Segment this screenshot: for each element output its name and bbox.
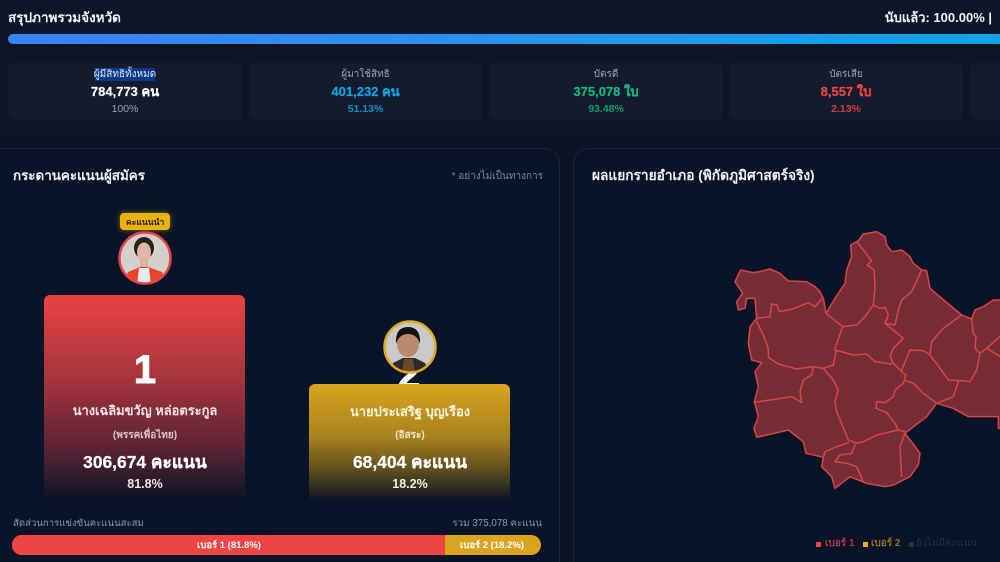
avatar: candidate 2	[383, 320, 437, 374]
stat card: spoiled ballots: บัตรเสีย	[829, 69, 863, 80]
stat card: voters turned out: 51.13%	[348, 103, 383, 115]
top summary section	[0, 0, 1000, 135]
counted percentage: นับแล้ว: 100.00% |	[885, 10, 992, 25]
selected label highlight	[95, 68, 155, 81]
leader badge: คะแนนนำ	[126, 217, 164, 227]
map legend: เบอร์ 2	[871, 538, 900, 549]
leader badge	[120, 213, 170, 230]
legend: number 1	[816, 542, 821, 547]
stat card: eligible voters: 100%	[112, 103, 138, 115]
panel: district map	[573, 148, 1000, 562]
stat card: valid ballots: บัตรดี	[594, 69, 618, 80]
segment: number 2: เบอร์ 2 (18.2%)	[460, 540, 524, 551]
stat card: valid ballots: 93.48%	[588, 103, 624, 115]
legend: number 2	[863, 542, 868, 547]
map outline	[735, 232, 1000, 488]
candidate 2 party: (อิสระ)	[395, 430, 425, 441]
share bar total: รวม 375,078 คะแนน	[452, 518, 542, 529]
candidate 2 name: นายประเสริฐ บุญเรือง	[350, 404, 470, 419]
stat card: cut off at right edge	[970, 63, 1000, 120]
progress bar	[8, 34, 1000, 44]
panel heading: กระดานคะแนนผู้สมัคร	[13, 168, 145, 183]
stat card: spoiled ballots: 8,557 ใบ	[821, 84, 871, 99]
rank number 2, mostly hidden: 2	[398, 353, 420, 397]
candidate 1 party: (พรรคเพื่อไทย)	[113, 430, 177, 441]
candidate 1 name: นางเฉลิมขวัญ หล่อตระกูล	[73, 403, 217, 418]
map legend	[816, 537, 977, 549]
candidate 2 percent: 18.2%	[392, 477, 428, 491]
candidate 1 bar	[44, 295, 245, 500]
panel: candidate scoreboard	[0, 148, 560, 562]
avatar: candidate 1	[118, 231, 172, 285]
share bar	[12, 535, 541, 555]
stat card: eligible voters	[8, 63, 242, 120]
stat card: voters turned out	[249, 63, 482, 120]
candidate 1 percent: 81.8%	[127, 477, 163, 491]
segment: number 1: เบอร์ 1 (81.8%)	[197, 540, 261, 551]
stat card: eligible voters: ผู้มีสิทธิทั้งหมด	[94, 69, 156, 80]
segment: number 1	[12, 535, 445, 555]
share bar caption: สัดส่วนการแข่งขันคะแนนสะสม	[13, 518, 144, 529]
district borders	[754, 242, 1000, 482]
candidate 2 votes: 68,404 คะแนน	[353, 452, 467, 472]
heading: province overview: สรุปภาพรวมจังหวัด	[8, 10, 121, 25]
candidate 2 bar	[309, 384, 510, 500]
stat card: valid ballots	[489, 63, 723, 120]
rank number 1: 1	[134, 348, 156, 392]
stat card: spoiled ballots	[729, 63, 963, 120]
legend: no votes	[909, 542, 914, 547]
stat card: voters turned out: ผู้มาใช้สิทธิ	[341, 69, 390, 80]
stat card: spoiled ballots: 2.13%	[831, 103, 861, 115]
stat card: eligible voters: 784,773 คน	[91, 84, 159, 99]
stat card: valid ballots: 375,078 ใบ	[573, 84, 639, 99]
map heading: ผลแยกรายอำเภอ (พิกัดภูมิศาสตร์จริง)	[592, 168, 815, 183]
map legend: ยังไม่มีคะแนน	[916, 538, 977, 549]
candidate 1 votes: 306,674 คะแนน	[83, 452, 207, 472]
stat card: voters turned out: 401,232 คน	[331, 84, 400, 99]
unofficial note: * อย่างไม่เป็นทางการ	[452, 171, 543, 182]
map legend: เบอร์ 1	[825, 538, 854, 549]
